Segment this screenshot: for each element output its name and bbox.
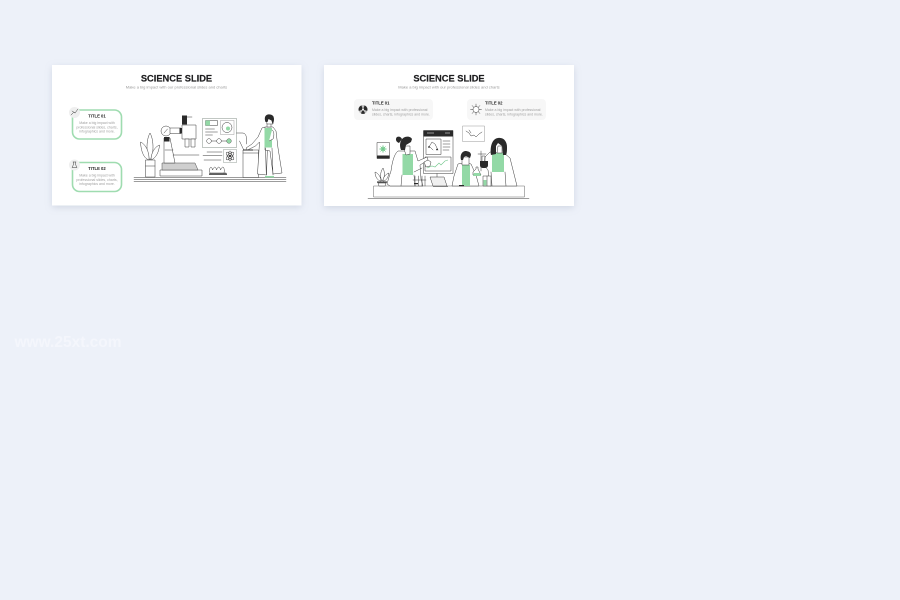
- figure: scientist center: [452, 151, 481, 186]
- card: title 02: TITLE 02: [88, 166, 106, 171]
- card: title 01: Make a big impact with: [79, 121, 115, 125]
- watermark: www.25xt.com: [13, 334, 122, 351]
- slide 1 subtitle: Make a big impact with our professional slides and charts: [126, 84, 227, 90]
- card: title 01: TITLE 01: [88, 114, 106, 118]
- panel: slide 1: [52, 65, 302, 206]
- icon: microscope: [160, 116, 202, 176]
- figure: scientist right: [484, 138, 517, 186]
- slide 1 title: SCIENCE SLIDE: [141, 74, 212, 84]
- card: title 02: infographics and more.: [79, 182, 115, 186]
- illustration: three scientists: [368, 126, 529, 198]
- sample jars: [483, 176, 491, 186]
- card: title 02: slides, charts, infographics and more.: [485, 112, 543, 116]
- floor: [134, 178, 286, 182]
- panel: slide 2: [324, 65, 574, 206]
- card: title 02: Make a big impact with: [79, 174, 115, 178]
- figure: scientist: [246, 114, 282, 178]
- potted plant: [375, 168, 389, 186]
- figure: scientist left: [387, 137, 431, 186]
- icon: virus: [470, 104, 482, 115]
- card: title 02: Make a big impact with professional: [485, 108, 541, 112]
- lab counter: [240, 141, 258, 178]
- laptop: [430, 177, 448, 187]
- card: title 01: TITLE 01: [372, 100, 390, 106]
- note lines: [203, 152, 222, 160]
- icon: seedling tray: [209, 167, 227, 175]
- wall poster: [377, 142, 390, 158]
- card: title 01: Make a big impact with professional: [372, 108, 428, 112]
- icon: potted plant: [140, 133, 160, 177]
- beaker and stand: [478, 151, 488, 171]
- card: title 02: [69, 160, 122, 192]
- test tube rack: [413, 176, 426, 186]
- molecule frame: [462, 126, 484, 142]
- connector cable: [236, 133, 246, 144]
- card: title 02: TITLE 02: [485, 100, 503, 106]
- card: title 01: slides, charts, infographics and more.: [372, 112, 430, 116]
- slide 2 title: SCIENCE SLIDE: [413, 74, 485, 84]
- card: title 01: professional slides, charts,: [76, 125, 118, 129]
- icon: title 02 badge: [69, 160, 80, 170]
- illustration: microscope lab: [134, 114, 286, 182]
- desk: [368, 186, 529, 198]
- panel: data board: [202, 118, 236, 148]
- icon: atom card: [224, 150, 236, 162]
- icon: title 01 badge: [69, 107, 80, 118]
- card: title 01: [69, 107, 122, 139]
- card: title 01: infographics and more.: [79, 130, 115, 134]
- slide 2 subtitle: Make a big impact with our professional slides and charts: [398, 84, 500, 90]
- presentation board: [424, 130, 453, 180]
- icon: radiation: [358, 105, 368, 114]
- card: title 01: [354, 99, 433, 120]
- card: title 02: [467, 99, 546, 120]
- card: title 02: professional slides, charts,: [76, 178, 118, 182]
